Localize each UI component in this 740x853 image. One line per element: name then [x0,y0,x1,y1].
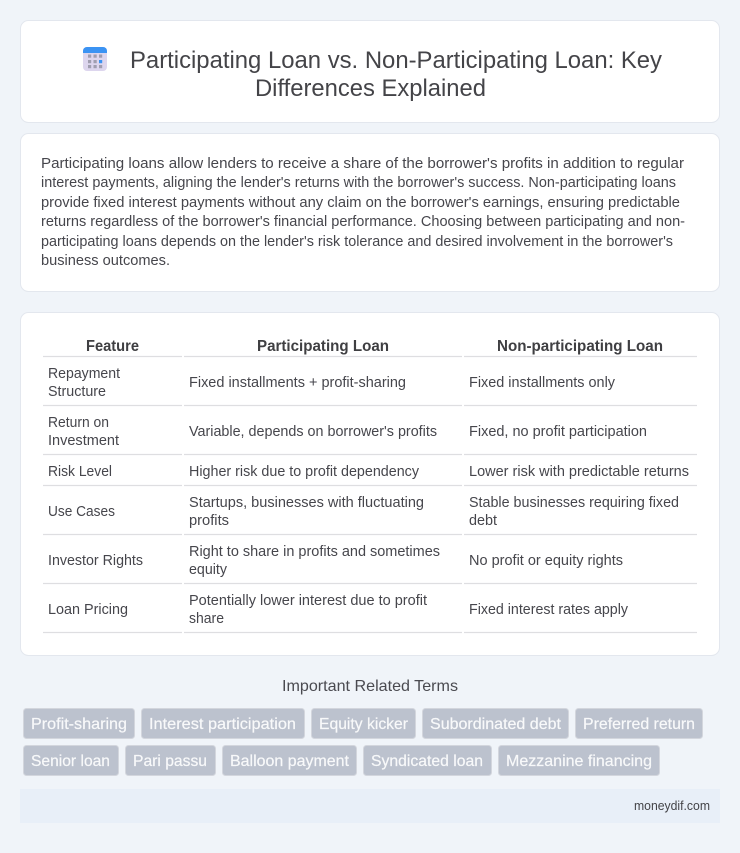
row: return on investment: Fixed, no profit participation [469,424,647,440]
row: loan pricing [48,593,629,627]
title: Differences Explained [255,75,486,102]
panel: introduction text [20,134,720,292]
footer bar [20,789,720,823]
footer bar: moneydif.com [634,799,710,813]
panel: introduction text: Participating loans allow lenders to receive a share of the borrower's profits in addition to regular [41,156,684,172]
row: return on investment: Investment [48,433,119,449]
tags: related terms: Senior loan [31,753,110,770]
row: repayment structure: Fixed installments + profit-sharing [189,375,406,391]
panel: introduction text: provide fixed interest payments without any claim on the borrower's earnings, ensuring predictable [41,195,680,211]
table header: Feature [86,338,139,355]
panel: introduction text: participating loans depends on the lender's risk tolerance and desired involvement in the borrower's [41,234,673,250]
row: investor rights [48,544,623,578]
tags: related terms: Subordinated debt [430,716,562,733]
row: loan pricing: share [189,611,224,627]
row: use cases: Startups, businesses with fluctuating [189,495,424,511]
panel: comparison table [20,312,720,656]
panel: introduction text: returns regardless of the borrower's financial performance. Choosing between participating and non- [41,214,685,230]
table header: Non-participating Loan [497,338,663,355]
row: loan pricing: Loan Pricing [48,602,128,618]
row: repayment structure: Repayment [48,366,120,382]
tags: related terms: Preferred return [583,716,695,733]
row: risk level: Risk Level [48,464,112,480]
heading: related terms: Important Related Terms [282,678,458,695]
table header [86,338,663,355]
row: repayment structure: Structure [48,384,106,400]
title: Participating Loan vs. Non-Participating Loan: Key [130,47,662,74]
row: loan pricing: Fixed interest rates apply [469,602,629,618]
row: risk level: Lower risk with predictable returns [469,464,689,480]
row: loan pricing: Potentially lower interest due to profit [189,593,427,609]
row: use cases [48,495,679,529]
tags: related terms: Pari passu [133,753,207,770]
tags: related terms: Equity kicker [319,716,409,733]
icon: calendar [83,47,107,71]
row: return on investment: Return on [48,415,109,431]
panel: title header [20,20,720,122]
tags: related terms [24,708,702,776]
row: investor rights: Investor Rights [48,553,143,569]
row: return on investment: Variable, depends on borrower's profits [189,424,437,440]
tags: related terms: Profit-sharing [31,716,127,733]
row: repayment structure [48,366,616,400]
row: use cases: debt [469,513,497,529]
row: investor rights: No profit or equity rights [469,553,623,569]
tags: related terms: Interest participation [149,716,296,733]
row: investor rights: Right to share in profits and sometimes [189,544,440,560]
panel: introduction text: business outcomes. [41,253,170,269]
row: use cases: profits [189,513,229,529]
table header: Participating Loan [257,338,389,355]
row: repayment structure: Fixed installments only [469,375,616,391]
tags: related terms: Balloon payment [230,753,350,770]
tags: related terms: Syndicated loan [371,753,483,770]
row: risk level: Higher risk due to profit dependency [189,464,420,480]
row: return on investment [48,415,647,449]
row: risk level [48,464,689,480]
tags: related terms: Mezzanine financing [506,753,652,770]
row: use cases: Use Cases [48,504,115,520]
row: use cases: Stable businesses requiring fixed [469,495,679,511]
title [130,47,662,102]
panel: introduction text: interest payments, aligning the lender's returns with the borrower's success. Non-participating loans [41,175,676,191]
row: investor rights: equity [189,562,228,578]
